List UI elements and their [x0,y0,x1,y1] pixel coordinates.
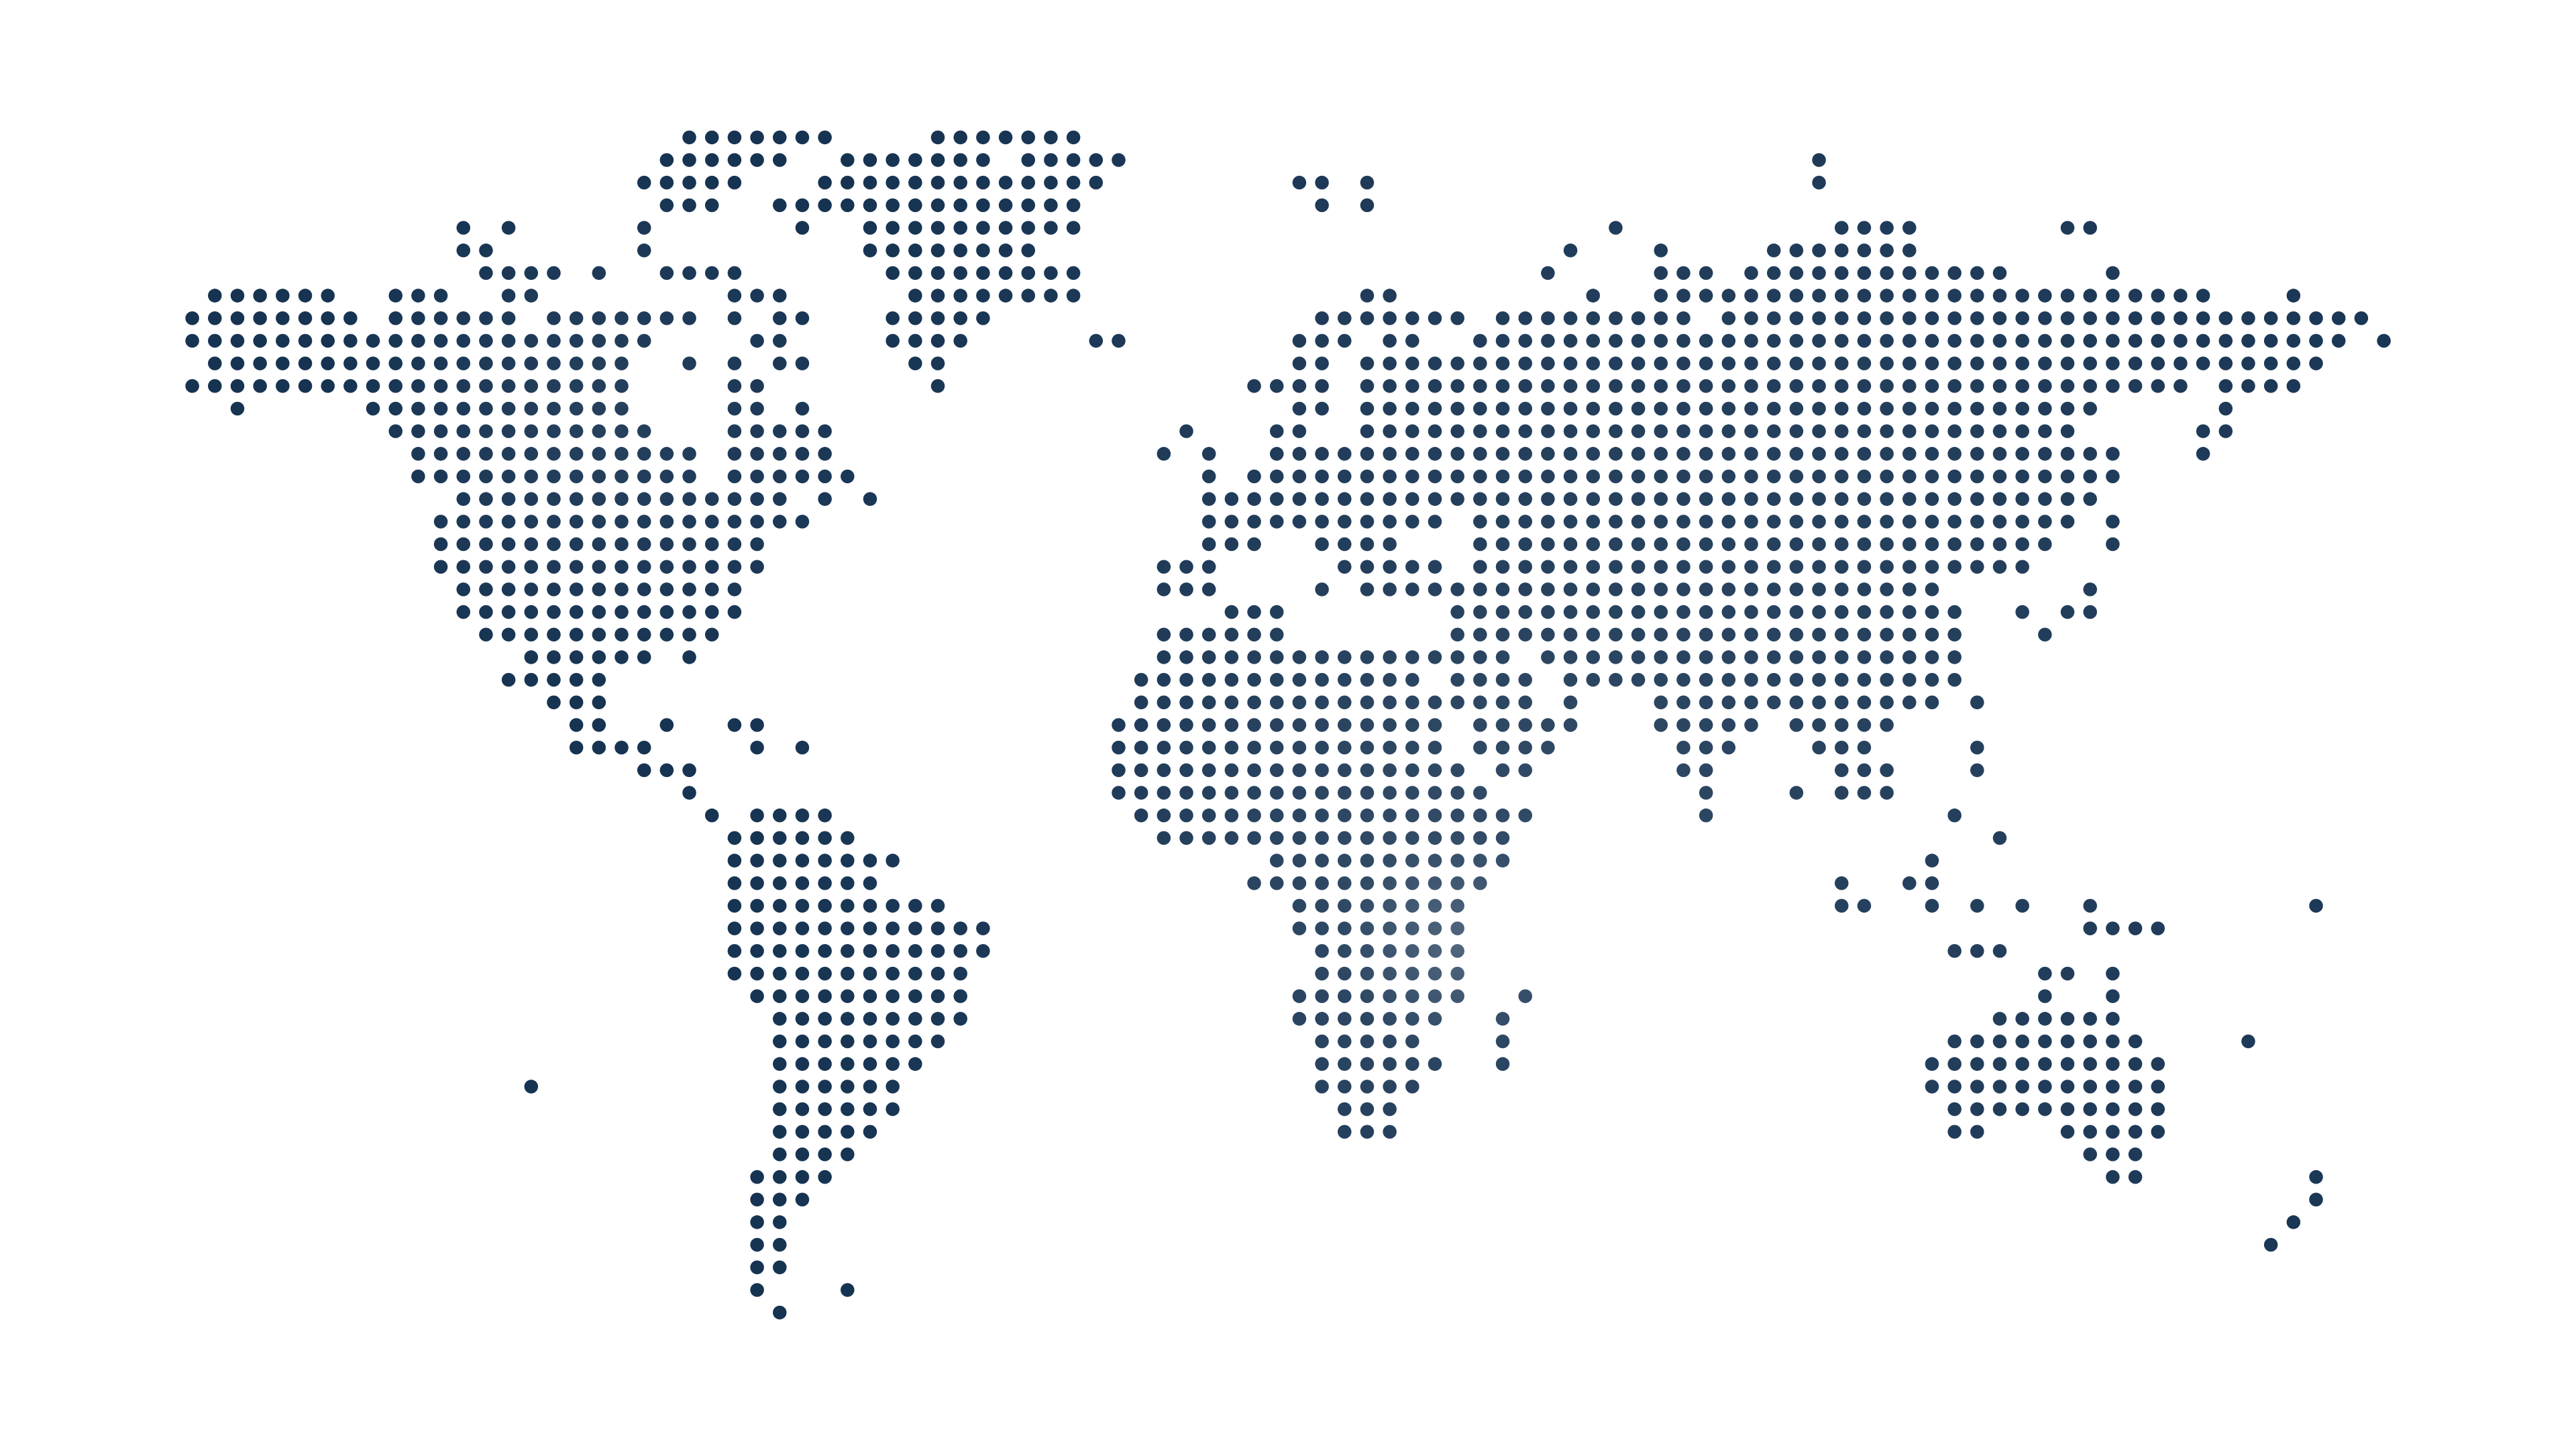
landmass: Eurasia [1164,160,2395,906]
landmass: South America [735,815,994,1312]
landmass: Australia and Oceania [1932,906,2327,1245]
landmass: North America [193,138,881,815]
island: South Pacific [531,1086,543,1087]
landmass: Greenland and Iceland [780,138,1130,386]
landmass: Africa and Arabia [1118,612,1582,1132]
